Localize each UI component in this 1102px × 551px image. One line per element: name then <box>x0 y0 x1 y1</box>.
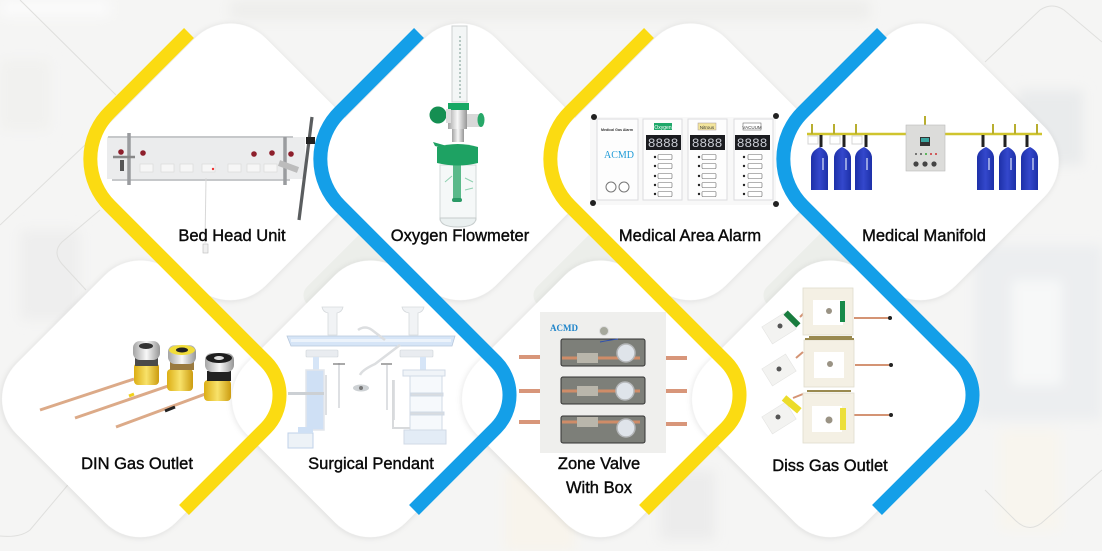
product: medical area alarm: Nitrous <box>700 125 715 130</box>
product: medical manifold <box>807 116 1042 190</box>
blue ribbon 1 <box>320 33 510 510</box>
product: diss gas outlets <box>762 288 893 443</box>
product: medical area alarm: 8888 <box>737 136 767 151</box>
product: oxygen flowmeter <box>430 26 484 227</box>
panel: diss gas outlet card <box>671 240 989 551</box>
label: Medical Manifold: Medical Manifold <box>862 227 986 245</box>
product: medical area alarm: Medical Gas Alarm <box>601 128 633 132</box>
panel: manifold card <box>761 3 1079 321</box>
label: Oxygen Flowmeter: Oxygen Flowmeter <box>391 227 530 245</box>
product: medical area alarm: ACMD <box>604 150 634 161</box>
label: Diss Gas Outlet: Diss Gas Outlet <box>772 457 888 475</box>
label: Zone Valve With Box: Zone Valve <box>558 455 640 473</box>
product: medical area alarm: Oxygen <box>654 125 672 131</box>
product: zone valve box <box>519 312 687 453</box>
yellow ribbon 1 <box>90 33 280 510</box>
product: DIN gas outlets <box>40 341 234 427</box>
label: Zone Valve With Box <box>558 455 640 497</box>
product: zone valve box: ACMD <box>550 323 578 333</box>
panel: DIN gas outlet card <box>0 240 299 551</box>
label: DIN Gas Outlet: DIN Gas Outlet <box>81 455 193 473</box>
panel: surgical pendant card <box>211 240 529 551</box>
panel: bed head unit card <box>71 3 389 321</box>
label: Bed Head Unit: Bed Head Unit <box>178 227 286 245</box>
panel: area alarm card <box>531 3 849 321</box>
blue ribbon 2 <box>783 33 973 510</box>
panel: zone valve card <box>441 240 759 551</box>
label: Zone Valve With Box: With Box <box>566 479 633 497</box>
product: bed head unit <box>107 117 315 253</box>
label: Surgical Pendant: Surgical Pendant <box>308 455 434 473</box>
product: medical area alarm: VACUUM <box>742 125 762 130</box>
product: medical area alarm: 8888 <box>692 136 722 151</box>
product: medical area alarm <box>590 113 779 207</box>
panel: oxygen flowmeter card <box>301 3 619 321</box>
product: medical area alarm: 8888 <box>648 136 678 151</box>
product: surgical pendant <box>287 307 455 448</box>
label: Medical Area Alarm: Medical Area Alarm <box>619 227 761 245</box>
yellow ribbon 2 <box>550 33 740 510</box>
